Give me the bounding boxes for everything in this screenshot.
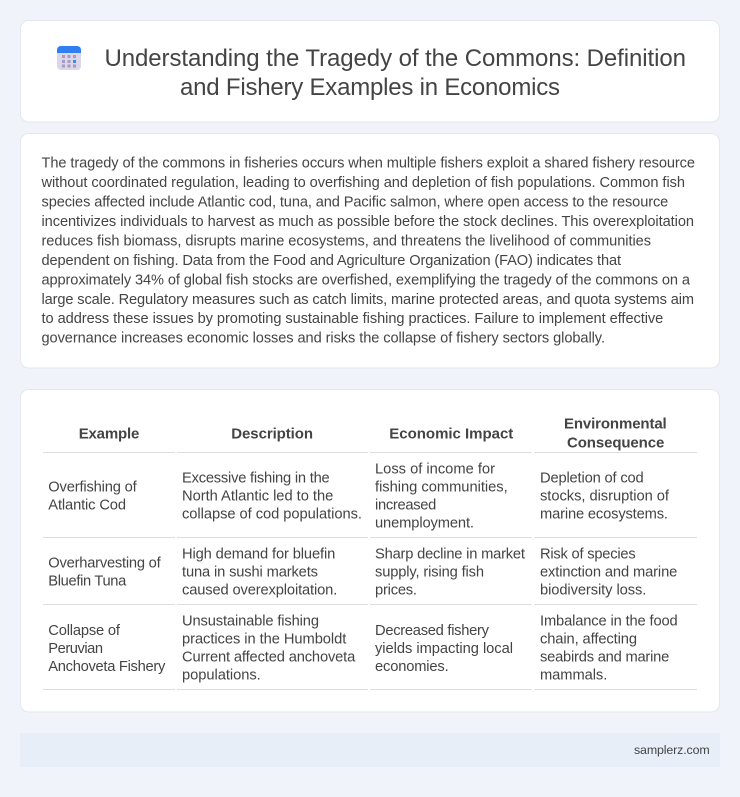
text block: summary: large scale. Regulatory measures such as catch limits, marine protected areas, and quota systems aim — [42, 292, 694, 308]
panel: examples table — [20, 390, 720, 712]
footer: samplerz.com — [634, 743, 710, 757]
table row: Atlantic cod: increased — [375, 498, 436, 514]
table row: Atlantic cod: stocks, disruption of — [540, 489, 670, 505]
title — [104, 45, 686, 101]
table row: Peruvian anchoveta — [48, 614, 678, 684]
table row: Bluefin tuna: Sharp decline in market — [375, 546, 525, 562]
table row: Bluefin tuna: supply, rising fish — [375, 564, 484, 580]
text block: summary: incentivizes individuals to harvest as much as possible before the stock declines. This overexploitation — [42, 214, 694, 230]
table header row: Consequence — [567, 434, 664, 451]
panel: title card — [20, 20, 720, 122]
text block: summary: dependent on fishing. Data from the Food and Agriculture Organization (FAO) indicates that — [42, 253, 621, 269]
table row: Peruvian anchoveta: Current affected anchoveta — [182, 650, 356, 666]
icon: calendar — [57, 46, 81, 70]
table row: Peruvian anchoveta: chain, affecting — [540, 632, 637, 648]
table row: Bluefin tuna: biodiversity loss. — [540, 582, 646, 598]
table row: Bluefin tuna — [48, 546, 677, 598]
table header row: Economic Impact — [389, 425, 513, 442]
text block: summary: governance increases economic losses and risks the collapse of fishery sectors globally. — [42, 331, 605, 347]
table row: Peruvian anchoveta: yields impacting local — [375, 641, 513, 657]
table row: Atlantic cod: fishing communities, — [375, 480, 508, 496]
table header row: Environmental — [564, 415, 667, 432]
table header row — [79, 415, 667, 451]
table row: Atlantic cod — [48, 462, 670, 532]
table row: Atlantic cod: North Atlantic led to the — [182, 489, 333, 505]
title: Understanding the Tragedy of the Commons: Definition — [104, 45, 686, 72]
table row: Bluefin tuna: prices. — [375, 582, 417, 598]
table row: Peruvian anchoveta: Decreased fishery — [375, 623, 490, 639]
table row: Atlantic cod: Depletion of cod — [540, 471, 644, 487]
table row: Atlantic cod: unemployment. — [375, 516, 474, 532]
table row: Bluefin tuna: tuna in sushi markets — [182, 564, 318, 580]
table row: Atlantic cod: Overfishing of — [48, 480, 138, 496]
table header row: Description — [231, 425, 313, 442]
text block: summary: without coordinated regulation, leading to overfishing and depletion of fish populations. Common fish — [40, 175, 685, 191]
table row: Bluefin tuna: Risk of species — [540, 546, 636, 562]
table row: Atlantic cod: Excessive fishing in the — [182, 471, 330, 487]
table row: Peruvian anchoveta: Peruvian — [48, 641, 103, 657]
table row: Bluefin tuna: caused overexploitation. — [182, 582, 337, 598]
table row: Bluefin tuna: Bluefin Tuna — [48, 574, 127, 590]
table row: Peruvian anchoveta: practices in the Humboldt — [182, 632, 346, 648]
text block: summary: to address these issues by promoting sustainable fishing practices. Failure to implement effective — [42, 311, 663, 327]
text block: summary: species affected include Atlantic cod, tuna, and Pacific salmon, where open access to the resource — [42, 194, 668, 210]
table row: Peruvian anchoveta: Collapse of — [48, 623, 121, 639]
table row: Peruvian anchoveta: populations. — [182, 668, 261, 684]
table row: Peruvian anchoveta: mammals. — [540, 668, 607, 684]
table row: Peruvian anchoveta: Imbalance in the food — [540, 614, 678, 630]
footer — [20, 733, 720, 767]
table row: Bluefin tuna: Overharvesting of — [48, 556, 162, 572]
title: and Fishery Examples in Economics — [180, 74, 560, 101]
table row: Atlantic cod: Atlantic Cod — [48, 498, 126, 514]
table row: Atlantic cod: Loss of income for — [375, 462, 495, 478]
table row: Peruvian anchoveta: economies. — [375, 659, 449, 675]
table row: Atlantic cod: marine ecosystems. — [540, 507, 668, 523]
table row: Peruvian anchoveta: seabirds and marine — [540, 650, 669, 666]
table row: Peruvian anchoveta: Anchoveta Fishery — [48, 659, 166, 675]
text block: summary: reduces fish biomass, disrupts marine ecosystems, and threatens the livelihood of communities — [42, 233, 651, 249]
text block: summary: The tragedy of the commons in fisheries occurs when multiple fishers exploit a shared fishery resource — [42, 156, 695, 172]
text block: summary: approximately 34% of global fish stocks are overfished, exemplifying the tragedy of the commons on a — [42, 272, 691, 288]
table row: Bluefin tuna: extinction and marine — [540, 564, 677, 580]
panel: summary paragraph — [20, 134, 720, 368]
text block: summary — [40, 156, 695, 347]
table header row: Example — [79, 425, 139, 442]
table row: Bluefin tuna: High demand for bluefin — [182, 546, 335, 562]
table row: Peruvian anchoveta: Unsustainable fishing — [182, 614, 319, 630]
table row: Atlantic cod: collapse of cod populations. — [182, 507, 362, 523]
